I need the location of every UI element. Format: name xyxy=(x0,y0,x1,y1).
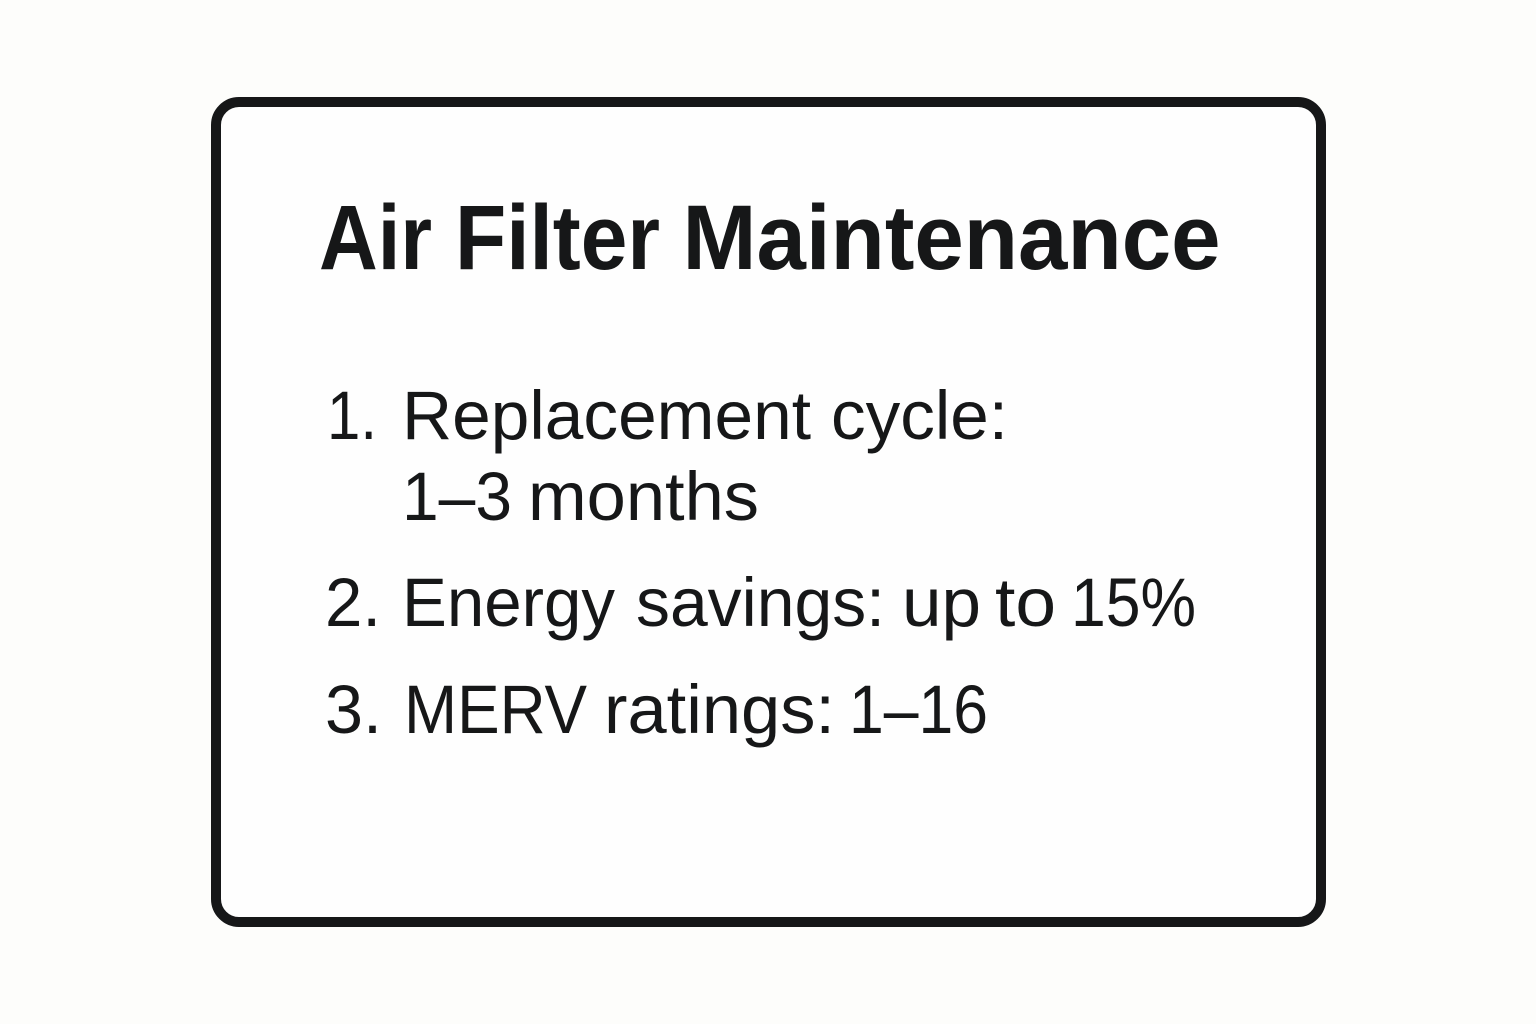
list item 3: MERV ratings: 1–16 xyxy=(849,671,988,748)
list item 1: replacement cycle: Replacement xyxy=(402,377,811,454)
title: Maintenance xyxy=(682,187,1220,289)
list item 1: replacement cycle xyxy=(327,377,1008,535)
list item 3: MERV ratings: MERV xyxy=(404,671,587,748)
list item 2: energy savings: to xyxy=(995,564,1056,641)
title: Air xyxy=(319,187,432,289)
list item 3: MERV ratings: ratings: xyxy=(604,671,835,748)
list item 2: energy savings: 2. xyxy=(325,564,381,641)
list item 2: energy savings: 15% xyxy=(1071,564,1196,641)
list item 1: replacement cycle: 1–3 xyxy=(402,458,512,535)
title: Filter xyxy=(455,187,660,289)
list item 3: MERV ratings xyxy=(325,671,988,748)
list item 2: energy savings: Energy xyxy=(402,564,615,641)
list item 2: energy savings: savings: xyxy=(636,564,885,641)
list item 1: replacement cycle: cycle: xyxy=(831,377,1008,454)
panel: card xyxy=(216,102,1321,922)
title xyxy=(319,187,1220,289)
numbered list xyxy=(325,377,1196,748)
list item 1: replacement cycle: months xyxy=(528,458,759,535)
list item 2: energy savings xyxy=(325,564,1196,641)
list item 1: replacement cycle: 1. xyxy=(327,377,377,454)
list item 2: energy savings: up xyxy=(902,564,981,641)
list item 3: MERV ratings: 3. xyxy=(325,671,382,748)
